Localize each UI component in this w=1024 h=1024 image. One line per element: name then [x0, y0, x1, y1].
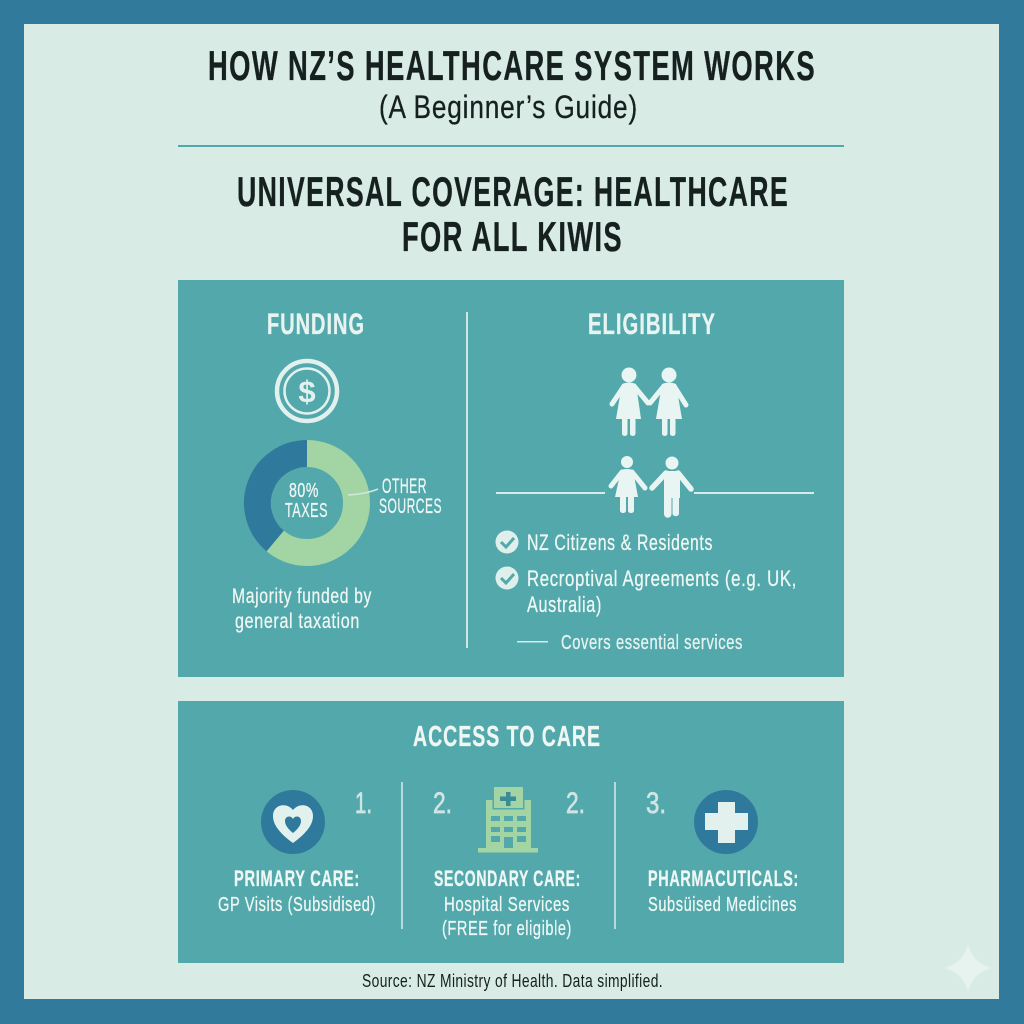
panel: funding and eligibility	[178, 280, 844, 677]
essential services note: Covers essential services	[561, 632, 743, 654]
step numbers	[433, 787, 585, 820]
icon: dollar coin	[277, 361, 337, 421]
donut label: 80%	[289, 480, 319, 502]
secondary care text: SECONDARY CARE:	[434, 866, 581, 891]
other sources callout: SOURCES	[379, 495, 442, 518]
check item: reciprocal agreements: Recroptival Agreements (e.g. UK,	[527, 566, 797, 591]
icon: heart	[261, 790, 325, 854]
funding note	[232, 585, 372, 633]
access heading: ACCESS TO CARE	[413, 721, 601, 753]
donut label	[285, 480, 328, 522]
secondary care text: Hospital Services	[444, 894, 570, 916]
column: pharmaceuticals	[646, 787, 799, 916]
donut label: TAXES	[285, 500, 328, 522]
other sources callout: OTHER	[382, 475, 427, 498]
check item: reciprocal agreements	[496, 566, 797, 617]
pharmaceuticals text: PHARMACUTICALS:	[648, 866, 799, 891]
eligibility heading: ELIGIBILITY	[588, 308, 716, 341]
funding heading: FUNDING	[267, 308, 365, 341]
primary care text: GP Visits (Subsidised)	[218, 894, 376, 916]
step numbers: 2.	[566, 787, 585, 820]
donut chart	[257, 453, 356, 552]
column: primary care	[218, 787, 376, 916]
icon: two women holding hands	[612, 368, 686, 436]
pharmaceuticals text: Subsüised Medicines	[648, 894, 797, 916]
source note: Source: NZ Ministry of Health. Data simplified.	[362, 971, 663, 991]
column: secondary care	[433, 786, 585, 940]
primary care text: PRIMARY CARE:	[234, 866, 360, 891]
subtitle: (A Beginner’s Guide)	[379, 89, 638, 125]
icon: medical cross	[694, 790, 758, 854]
funding note: general taxation	[235, 610, 360, 633]
step numbers: 2.	[433, 787, 452, 820]
icon: dollar coin: $	[298, 374, 316, 409]
funding note: Majority funded by	[232, 585, 372, 608]
section heading: FOR ALL KIWIS	[402, 213, 623, 260]
step number: 1.	[355, 787, 372, 820]
icon: woman and man	[611, 456, 691, 518]
check item: reciprocal agreements: Australia)	[527, 592, 602, 617]
secondary care text: (FREE for eligible)	[442, 918, 572, 940]
icon: hospital	[478, 786, 538, 852]
step number: 3.	[646, 787, 666, 820]
other sources callout	[348, 475, 442, 518]
check item: citizens	[496, 530, 713, 555]
panel: access to care	[178, 701, 844, 963]
primary care text	[218, 866, 376, 916]
check item: citizens: NZ Citizens & Residents	[527, 530, 713, 555]
pharmaceuticals text	[648, 866, 799, 916]
panel: funding	[232, 308, 442, 633]
panel: eligibility	[496, 308, 814, 654]
icon: sparkle	[944, 944, 992, 992]
section heading	[237, 168, 789, 260]
secondary care text	[434, 866, 581, 940]
